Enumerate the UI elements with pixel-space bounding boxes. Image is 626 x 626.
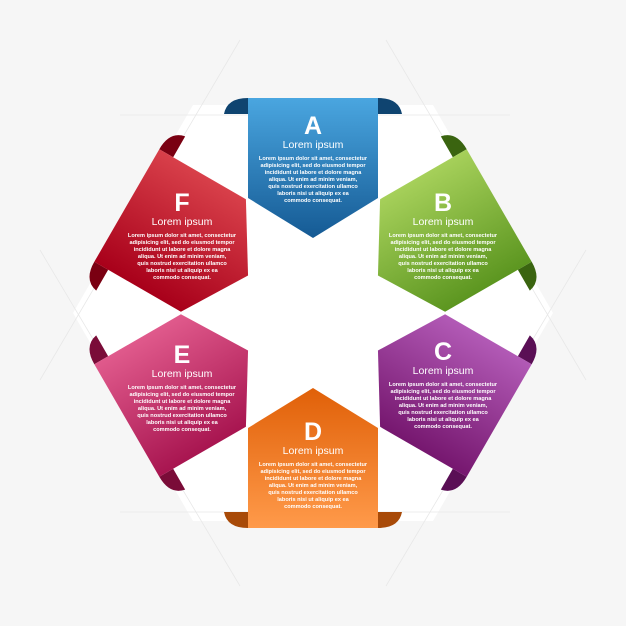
text B: B — [434, 189, 452, 217]
text A: Lorem ipsum dolor sit amet, consectetur — [259, 156, 368, 162]
text F: Lorem ipsum dolor sit amet, consectetur — [128, 233, 237, 239]
panel B — [333, 128, 544, 353]
text B: Lorem ipsum dolor sit amet, consectetur — [389, 233, 498, 239]
text D: laboris nisi ut aliquip ex ea — [277, 497, 350, 503]
text E: laboris nisi ut aliquip ex ea — [146, 420, 219, 426]
text B: Lorem ipsum — [413, 216, 474, 228]
text C: incididunt ut labore et dolore magna — [395, 396, 492, 402]
text E: E — [174, 341, 190, 369]
text D: Lorem ipsum dolor sit amet, consectetur — [259, 462, 368, 468]
text A: laboris nisi ut aliquip ex ea — [277, 191, 350, 197]
text B: incididunt ut labore et dolore magna — [395, 247, 492, 253]
text A: commodo consequat. — [284, 198, 342, 204]
text A: aliqua. Ut enim ad minim veniam, — [269, 177, 358, 183]
text F: commodo consequat. — [153, 275, 211, 281]
text C: C — [434, 338, 452, 366]
text B: quis nostrud exercitation ullamco — [398, 261, 488, 267]
text E: Lorem ipsum dolor sit amet, consectetur — [128, 385, 237, 391]
text B: aliqua. Ut enim ad minim veniam, — [399, 254, 488, 260]
text A: adipisicing elit, sed do eiusmod tempor — [260, 163, 366, 169]
text D: incididunt ut labore et dolore magna — [265, 476, 362, 482]
text D: D — [304, 418, 322, 446]
panel E — [82, 273, 293, 498]
text E: commodo consequat. — [153, 427, 211, 433]
text E: incididunt ut labore et dolore magna — [134, 399, 231, 405]
text F: F — [174, 189, 190, 217]
panel C — [333, 273, 544, 498]
text F: quis nostrud exercitation ullamco — [137, 261, 227, 267]
panel F — [82, 128, 293, 353]
text B: adipisicing elit, sed do eiusmod tempor — [390, 240, 496, 246]
text B — [389, 189, 498, 281]
text F: Lorem ipsum — [152, 216, 213, 228]
text F: adipisicing elit, sed do eiusmod tempor — [129, 240, 235, 246]
panel A — [224, 98, 402, 238]
text C: adipisicing elit, sed do eiusmod tempor — [390, 389, 496, 395]
text C: quis nostrud exercitation ullamco — [398, 410, 488, 416]
text E: adipisicing elit, sed do eiusmod tempor — [129, 392, 235, 398]
text F — [128, 189, 237, 281]
text C: laboris nisi ut aliquip ex ea — [407, 417, 480, 423]
text C: Lorem ipsum dolor sit amet, consectetur — [389, 382, 498, 388]
panel D — [224, 388, 402, 528]
text D: adipisicing elit, sed do eiusmod tempor — [260, 469, 366, 475]
text D: quis nostrud exercitation ullamco — [268, 490, 358, 496]
background hexagon — [73, 105, 553, 521]
text E — [128, 341, 237, 433]
text A: incididunt ut labore et dolore magna — [265, 170, 362, 176]
text D — [259, 418, 368, 510]
text F: incididunt ut labore et dolore magna — [134, 247, 231, 253]
text C: commodo consequat. — [414, 424, 472, 430]
text B: laboris nisi ut aliquip ex ea — [407, 268, 480, 274]
text C: Lorem ipsum — [413, 365, 474, 377]
text F: laboris nisi ut aliquip ex ea — [146, 268, 219, 274]
text D: Lorem ipsum — [283, 445, 344, 457]
text A: A — [304, 112, 322, 140]
text F: aliqua. Ut enim ad minim veniam, — [138, 254, 227, 260]
text C — [389, 338, 498, 430]
text D: commodo consequat. — [284, 504, 342, 510]
text A: quis nostrud exercitation ullamco — [268, 184, 358, 190]
text B: commodo consequat. — [414, 275, 472, 281]
text A: Lorem ipsum — [283, 139, 344, 151]
text E: Lorem ipsum — [152, 368, 213, 380]
text A — [259, 112, 368, 204]
text E: quis nostrud exercitation ullamco — [137, 413, 227, 419]
text E: aliqua. Ut enim ad minim veniam, — [138, 406, 227, 412]
text D: aliqua. Ut enim ad minim veniam, — [269, 483, 358, 489]
text C: aliqua. Ut enim ad minim veniam, — [399, 403, 488, 409]
